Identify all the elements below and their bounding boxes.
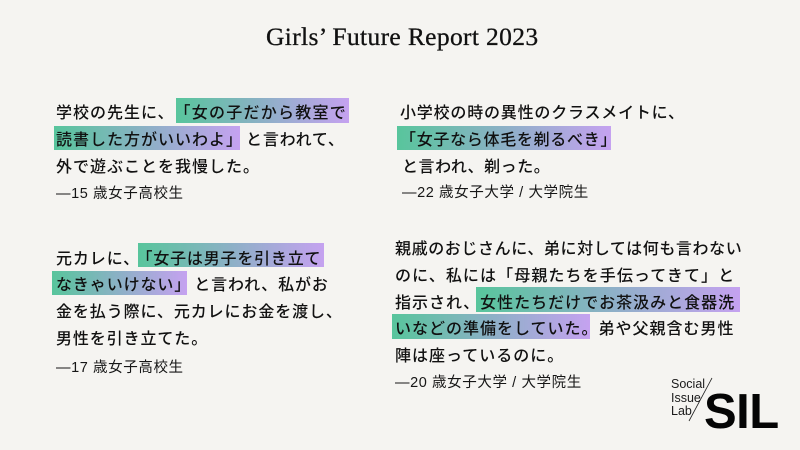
- panel: quote 17-year-old: [52, 243, 343, 376]
- highlight: second line: [54, 126, 240, 150]
- highlight: [397, 126, 611, 150]
- logo slash: [688, 378, 712, 422]
- panel: quote 20-year-old: [392, 235, 742, 391]
- logo SIL: SIL: [704, 385, 779, 439]
- quote line 3: 外で遊ぶことを我慢した。: [56, 153, 260, 177]
- logo small text: [671, 377, 705, 418]
- quote line 1: 親戚のおじさんに、弟に対しては何も言わない: [395, 235, 742, 259]
- highlight: first line: [176, 98, 349, 123]
- quote line 4: いなどの準備をしていた。弟や父親含む男性: [395, 315, 735, 339]
- logo small text: Issue: [671, 390, 701, 404]
- quote line 2: 「女子なら体毛を剃るべき」: [400, 126, 617, 150]
- highlight: first line: [138, 243, 324, 267]
- attribution: ―15 歳女子高校生: [56, 186, 184, 202]
- quote line 4: 男性を引き立てた。: [56, 325, 208, 349]
- logo small text: Lab: [671, 404, 692, 418]
- attribution: ―17 歳女子高校生: [56, 360, 184, 376]
- highlight: fourth line: [392, 314, 590, 339]
- quote line 3: 金を払う際に、元カレにお金を渡し、: [56, 298, 343, 322]
- quote line 1: 学校の先生に、「女の子だから教室で: [56, 99, 347, 123]
- quote line 2: 読書した方がいいわよ」と言われて、: [56, 126, 345, 150]
- attribution: ―22 歳女子大学 / 大学院生: [402, 185, 589, 201]
- quote line 5: 陣は座っているのに。: [395, 342, 564, 366]
- quote line 2: なきゃいけない」と言われ、私がお: [56, 271, 329, 295]
- quote line 1: 元カレに、「女子は男子を引き立て: [56, 245, 321, 269]
- title: Girls’ Future Report 2023: [266, 22, 538, 51]
- quote line 2: のに、私には「母親たちを手伝ってきて」と: [395, 262, 735, 286]
- quote line 3: 指示され、女性たちだけでお茶汲みと食器洗: [395, 289, 735, 313]
- logo small text: Social: [671, 377, 705, 391]
- highlight: second line: [52, 271, 187, 295]
- panel: quote 15-year-old: [54, 98, 349, 202]
- quote line 3: と言われ、剃った。: [402, 153, 550, 177]
- attribution: ―20 歳女子大学 / 大学院生: [395, 375, 582, 391]
- panel: quote 22-year-old: [397, 99, 685, 201]
- highlight: third line: [476, 287, 740, 312]
- quote line 1: 小学校の時の異性のクラスメイトに、: [400, 99, 685, 123]
- logo: Social Issue Lab SIL: [671, 377, 779, 439]
